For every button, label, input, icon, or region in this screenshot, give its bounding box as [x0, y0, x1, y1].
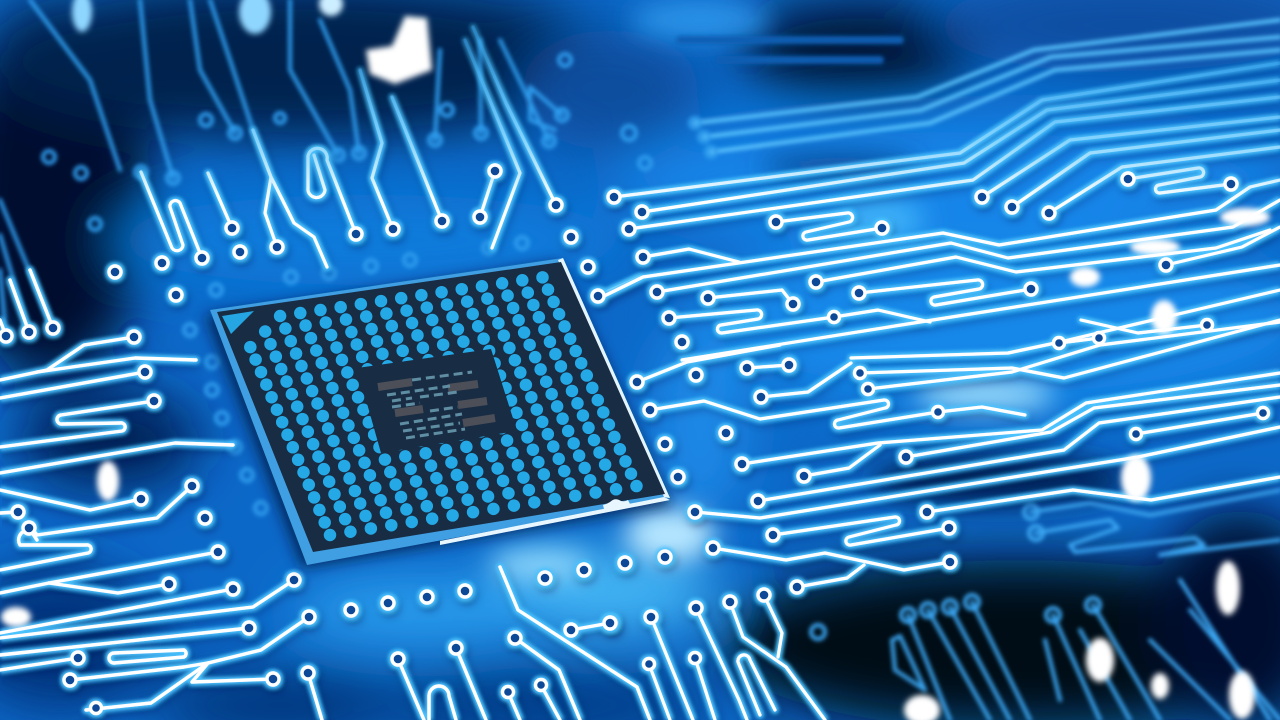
- traces: top left sharp: [109, 27, 640, 301]
- microchip: [205, 258, 672, 568]
- notch: [603, 499, 630, 509]
- traces: left board sharp: [0, 270, 650, 720]
- central die area: [357, 349, 517, 453]
- orientation triangle: [222, 311, 254, 334]
- traces: right board sharp: [345, 63, 1280, 720]
- blurred background traces: top area: [0, 0, 1280, 514]
- blurred background traces: bottom right: [811, 490, 1280, 720]
- chip top surface: [217, 262, 665, 552]
- solder ball grid: [250, 277, 637, 535]
- die components: [378, 372, 495, 438]
- chip package edge: [210, 258, 670, 565]
- chip shadow: [205, 262, 672, 568]
